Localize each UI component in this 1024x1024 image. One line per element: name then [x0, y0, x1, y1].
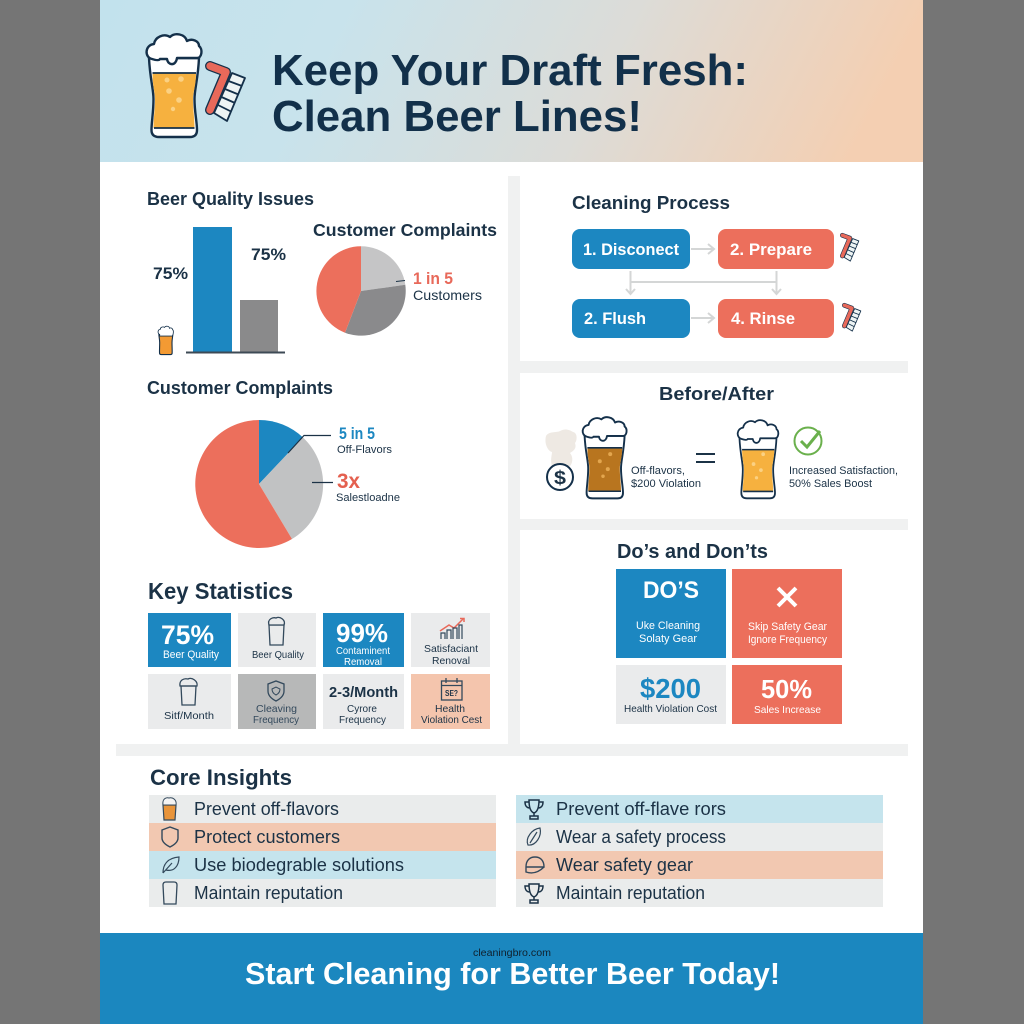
- bar chart: 75%: [153, 264, 188, 283]
- tile: do's: Solaty Gear: [639, 633, 697, 645]
- insight: maintain reputation: [149, 879, 496, 907]
- callout: off-flavors: Off-Flavors: [337, 444, 392, 456]
- step: rinse: [718, 299, 834, 338]
- insight: prevent off-flavors: [149, 795, 496, 823]
- stat tile: 75%: 75%: [161, 620, 214, 650]
- stat tile: 2-3 per month: [323, 674, 404, 729]
- tile: $200: $200: [640, 673, 701, 704]
- icon: brush prepare: [842, 235, 859, 261]
- insight: wear a safety process: [516, 823, 883, 851]
- pie chart: off-flavors and sales: [195, 420, 333, 548]
- step: flush: 2. Flush: [584, 310, 646, 328]
- tile: 50%: Sales Increase: [754, 704, 821, 716]
- step: prepare: [718, 229, 834, 269]
- stat tile: 2-3 per month: Frequency: [339, 714, 387, 726]
- equals sign: [696, 454, 715, 462]
- panel: before and after: [545, 384, 898, 498]
- insight: prevent off-flavors: Prevent off-flavors: [194, 799, 339, 819]
- icon: dollar: $: [554, 468, 566, 489]
- stat tile: shift per month: [148, 674, 231, 729]
- stat tile: 2-3 per month: Cyrore: [347, 703, 377, 715]
- after caption: [789, 465, 898, 490]
- heading: key statistics: Key Statistics: [148, 578, 293, 604]
- title: Clean Beer Lines!: [272, 93, 642, 141]
- heading: customer complaints: Customer Complaints: [313, 220, 497, 240]
- heading: do's and don'ts: Do’s and Don’ts: [617, 541, 768, 563]
- callout: 1 in 5 customers: Customers: [413, 287, 482, 303]
- insight: prevent off-flave rors: Prevent off-flave rors: [556, 799, 726, 819]
- stat tile: shift per month: Sitf/Month: [164, 710, 214, 722]
- tile: don'ts: [732, 569, 842, 658]
- panel: customer complaints large pie: [147, 378, 400, 548]
- tile: don'ts: Skip Safety Gear: [748, 621, 827, 633]
- stat tile: cleaning frequency: Cleaving: [256, 703, 297, 715]
- footer banner: [100, 933, 923, 1024]
- bar chart: [153, 227, 286, 354]
- step: flush: [572, 299, 690, 338]
- stat tile: satisfaction: [411, 613, 490, 667]
- insight: protect customers: [149, 823, 496, 851]
- panel: customer complaints small pie: [313, 220, 497, 336]
- heading: cleaning process: Cleaning Process: [572, 193, 730, 213]
- stat tile: satisfaction: Satisfaciant: [424, 643, 478, 655]
- website: cleaningbro.com: [473, 948, 551, 959]
- stat tile: cleaning frequency: [238, 674, 316, 729]
- pie chart: complaints: [316, 246, 406, 336]
- call to action: Start Cleaning for Better Beer Today!: [245, 957, 780, 991]
- stat tile: 99%: Contaminent: [336, 645, 390, 657]
- tile: don'ts: Ignore Frequency: [748, 634, 827, 646]
- callout: 1 in 5 customers: [413, 269, 482, 303]
- tile: $200: Health Violation Cost: [624, 703, 717, 715]
- title: [272, 47, 748, 141]
- after caption: 50% Sales Boost: [789, 478, 872, 490]
- stat tile: health violation cost: Health: [435, 703, 465, 715]
- tile: 50%: [732, 665, 842, 724]
- tile: do's: DO’S: [643, 577, 699, 604]
- stat tile: 75%: [148, 613, 231, 667]
- insight: biodegradable: [149, 851, 496, 879]
- heading: core insights: Core Insights: [150, 765, 292, 790]
- step: prepare: 2. Prepare: [730, 241, 812, 259]
- heading: customer complaints large: Customer Complaints: [147, 378, 333, 398]
- step: disconnect: 1. Disconect: [583, 241, 680, 259]
- stat tile: beer quality: Beer Quality: [252, 649, 305, 661]
- before caption: $200 Violation: [631, 478, 701, 490]
- icon: dollar: [547, 464, 573, 490]
- title: Keep Your Draft Fresh:: [272, 47, 748, 95]
- after caption: Increased Satisfaction,: [789, 465, 898, 477]
- step: rinse: 4. Rinse: [731, 310, 795, 328]
- stat tile: 75%: Beer Quality: [163, 649, 219, 661]
- panel: core insights: [149, 765, 883, 907]
- panel: key statistics: [148, 578, 490, 729]
- stat tile: 99%: Removal: [344, 656, 382, 668]
- heading: before after: Before/After: [659, 384, 774, 404]
- icon: fresh beer: [738, 420, 778, 498]
- header banner: [100, 0, 923, 162]
- icon: green check: [794, 428, 822, 454]
- insight: wear a safety process: Wear a safety process: [556, 827, 726, 847]
- before caption: Off-flavors,: [631, 465, 685, 477]
- insight: maintain reputation right: Maintain reputation: [556, 883, 705, 903]
- tile: $200: [616, 665, 726, 724]
- insight: maintain reputation right: [516, 879, 883, 907]
- tile: do's: Uke Cleaning: [636, 620, 700, 632]
- stat tile: satisfaction: Renoval: [432, 655, 470, 667]
- callout: sales: 3x: [337, 470, 360, 493]
- insight: wear safety gear: [516, 851, 883, 879]
- stat tile: 99%: 99%: [336, 618, 388, 648]
- callout: sales: [336, 470, 400, 504]
- heading: beer quality issues: Beer Quality Issues: [147, 189, 314, 209]
- bar chart: 75%: [251, 245, 286, 264]
- stat tile: cleaning frequency: Frequency: [253, 714, 300, 726]
- insight: prevent off-flave rors: [516, 795, 883, 823]
- callout: off-flavors: 5 in 5: [339, 424, 375, 443]
- tile: 50%: 50%: [761, 676, 812, 704]
- icon: small beer: [158, 326, 173, 355]
- step: disconnect: [572, 229, 690, 269]
- icon: beer glass: [147, 34, 201, 137]
- stat tile: beer quality: [238, 613, 316, 667]
- insight: protect customers: Protect customers: [194, 827, 340, 847]
- stat tile: health violation cost: [411, 674, 490, 729]
- insight: maintain reputation: Maintain reputation: [194, 883, 343, 903]
- stat tile: health violation cost: Violation Cest: [421, 714, 482, 726]
- panel: do's and don'ts: [616, 541, 842, 724]
- icon: brush rinse: [844, 305, 861, 331]
- tile: do's: [616, 569, 726, 658]
- panel: cleaning process: [572, 193, 861, 338]
- insight: biodegradable: Use biodegrable solutions: [194, 855, 404, 875]
- icon: cleaning brush: [210, 66, 245, 121]
- callout: sales: Salestloadne: [336, 492, 400, 504]
- icon: stale beer: [583, 417, 627, 498]
- icon: smoke: [545, 429, 577, 466]
- before caption: [631, 465, 701, 490]
- panel: beer quality issues: [147, 189, 314, 355]
- stat tile: health violation cost: SE?: [445, 689, 458, 698]
- stat tile: 99%: [323, 613, 404, 668]
- stat tile: 2-3 per month: 2-3/Month: [329, 684, 398, 701]
- insight: wear safety gear: Wear safety gear: [556, 855, 693, 875]
- callout: 1 in 5 customers: 1 in 5: [413, 269, 453, 288]
- arrows between steps: [626, 244, 781, 323]
- callout: off-flavors: [337, 424, 392, 456]
